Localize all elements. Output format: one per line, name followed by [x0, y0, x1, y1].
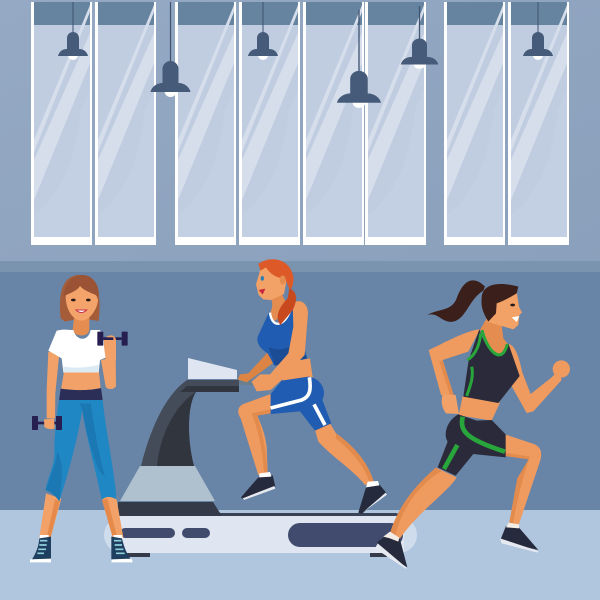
back hand: [442, 394, 459, 414]
lower arm: [47, 352, 59, 418]
deck slot 1: [120, 528, 175, 538]
midriff: [459, 396, 500, 421]
ponytail: [427, 280, 485, 322]
window pane 1: [31, 2, 92, 245]
woman with dumbbells: [30, 275, 133, 562]
left dumbbell: [32, 416, 62, 430]
treadmill feet: [127, 552, 387, 557]
back leg shade: [336, 433, 374, 483]
hair: [481, 284, 518, 322]
socks: [39, 535, 123, 540]
window pane 2: [95, 2, 156, 245]
far arm: [238, 352, 274, 382]
front leg: [505, 434, 541, 526]
left hand: [44, 419, 55, 429]
face: [487, 292, 522, 329]
window pane 7: [444, 2, 505, 245]
blue tank top: [257, 303, 307, 366]
front leg: [238, 394, 271, 475]
back leg: [315, 423, 374, 485]
lamp 1: [58, 2, 88, 60]
leggings: [45, 400, 116, 501]
short stripes: [444, 417, 505, 469]
window pane 5: [303, 2, 364, 245]
deck body: [118, 516, 404, 553]
arch outer: [141, 380, 239, 466]
soles: [375, 538, 538, 568]
neck and chest: [480, 318, 510, 360]
window pane 8: [508, 2, 569, 245]
floor: [0, 510, 600, 600]
back wall: [0, 0, 600, 262]
front leg shade: [252, 409, 271, 474]
windows: [31, 2, 569, 245]
face: [256, 263, 287, 300]
running belt top: [118, 513, 399, 519]
lamp 3: [248, 2, 278, 60]
front leg shade: [505, 453, 530, 526]
right hand and forearm: [104, 335, 116, 362]
hair back: [60, 275, 100, 322]
waistband: [59, 388, 103, 401]
neck: [73, 315, 89, 335]
dumbbell bar over hand: [103, 337, 113, 340]
woman on treadmill: [238, 259, 387, 514]
fringe: [63, 275, 99, 297]
ponytail: [278, 288, 296, 325]
socks: [383, 523, 519, 542]
left lower leg: [39, 493, 61, 537]
lamp 2: [150, 2, 190, 97]
right lower leg: [101, 496, 123, 537]
shoes: [241, 475, 387, 514]
hair: [258, 259, 293, 291]
console: [188, 358, 237, 379]
eyes and smile: [71, 299, 91, 312]
running woman: [375, 280, 570, 568]
dark shorts: [438, 414, 506, 476]
dark sports top: [463, 329, 520, 403]
wall trim band: [0, 261, 600, 272]
lower leg shade: [47, 499, 117, 537]
top shading: [63, 365, 99, 372]
back leg shade: [390, 468, 442, 536]
ear: [280, 275, 286, 285]
midriff: [282, 358, 313, 382]
handle grip: [239, 380, 255, 385]
fist: [553, 360, 570, 378]
mouth and eye: [259, 276, 265, 295]
lamp 4: [337, 10, 381, 108]
leggings shade: [46, 403, 105, 501]
deck end caps: [104, 517, 417, 553]
lamp 6: [523, 2, 553, 60]
face: [66, 285, 98, 321]
socks: [259, 472, 379, 487]
back arm shade: [439, 360, 454, 396]
right dumbbell: [97, 332, 128, 346]
white crop top: [48, 330, 109, 372]
collar trim: [270, 307, 292, 324]
deck slot 2: [182, 528, 210, 538]
back arm: [429, 329, 480, 396]
motor base: [118, 502, 222, 516]
shoe soles: [30, 559, 133, 562]
lamp 5: [401, 6, 438, 69]
lower wall: [0, 272, 600, 510]
window pane 6: [365, 2, 426, 245]
treadmill: [104, 358, 417, 557]
shoe laces: [37, 541, 125, 553]
arch inner shade: [157, 386, 239, 466]
hanging lamps: [58, 2, 553, 108]
neck: [270, 292, 292, 322]
blue shorts: [271, 377, 331, 431]
window pane 4: [239, 2, 300, 245]
eye and mouth: [510, 304, 519, 322]
forward arm: [508, 344, 562, 413]
large deck panel: [288, 523, 403, 547]
short stripes: [271, 377, 325, 425]
back leg: [390, 468, 457, 538]
near arm: [252, 301, 308, 391]
top shade: [268, 340, 307, 366]
shoes: [376, 526, 538, 567]
motor housing: [120, 466, 215, 501]
shoes: [31, 537, 132, 562]
top trim: [467, 330, 507, 396]
midriff: [61, 372, 101, 392]
window pane 3: [175, 2, 236, 245]
raised arm: [101, 357, 116, 389]
soles: [243, 486, 387, 514]
